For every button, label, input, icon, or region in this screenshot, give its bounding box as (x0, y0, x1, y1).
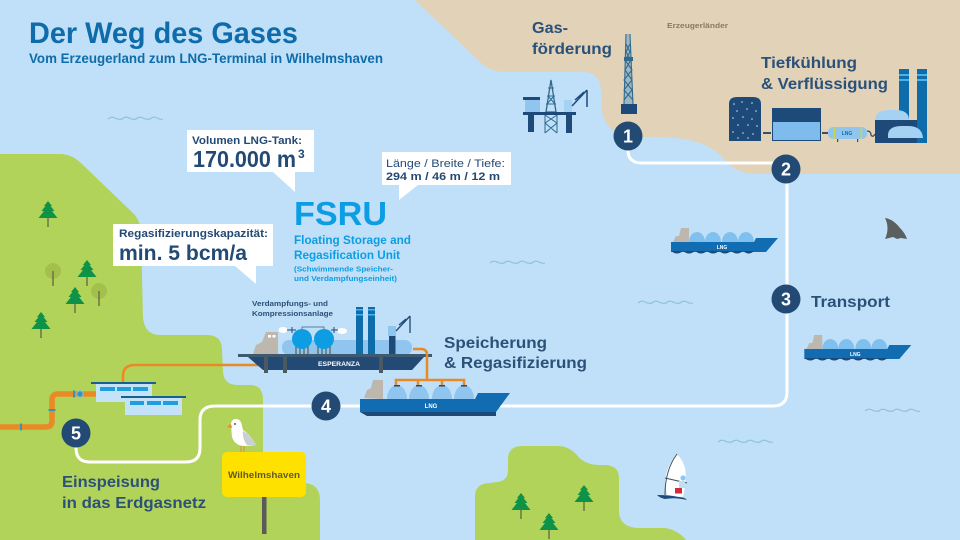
icon: shark fin (885, 218, 907, 239)
step label: Einspeisung (62, 474, 206, 512)
callout: Volumen LNG-Tank: 170.000 m (193, 146, 296, 172)
icon: seagull (227, 419, 256, 452)
label: Verdampfungsanlage: Verdampfungs- und (252, 299, 328, 308)
title: Der Weg des Gases (29, 17, 298, 50)
land: south island (475, 446, 686, 540)
orange transfer pipe (396, 349, 464, 385)
step marker 5 (62, 418, 90, 448)
step marker 3: 3 (781, 290, 791, 310)
icon: LNG tanker top (671, 228, 778, 254)
FSRU heading: und Verdampfungseinheit) (294, 276, 397, 283)
step label: Speicherung: Speicherung (444, 335, 547, 352)
callout: Regasifizierungskapazität (113, 224, 273, 284)
step label: Einspeisung: in das Erdgasnetz (62, 495, 206, 512)
step label: Speicherung (444, 335, 587, 372)
step marker 2: 2 (781, 160, 791, 180)
land: Erzeugerländer (415, 0, 960, 174)
icon: windsurfer (657, 454, 687, 500)
step marker 3 (772, 284, 800, 314)
step label: Tiefkühlung: Tiefkühlung (761, 55, 857, 72)
step label: Gasförderung (532, 20, 612, 58)
callout: Regasifizierungskapazität: min. 5 bcm/a (119, 242, 247, 265)
sign: Wilhelmshaven: Wilhelmshaven (228, 470, 300, 481)
subtitle: Vom Erzeugerland zum LNG-Terminal in Wilhelmshaven (29, 51, 383, 66)
icon: LNG tanker top: LNG (717, 245, 727, 251)
icon: terminal buildings (91, 382, 186, 415)
pipeline (0, 365, 258, 430)
FSRU heading (294, 195, 411, 283)
callout: Abmessungen (382, 152, 511, 200)
callout: Regasifizierungskapazität: Regasifizierungskapazität: (119, 228, 268, 240)
FSRU heading: Floating Storage and (294, 235, 411, 247)
icon: offshore platform (523, 80, 587, 133)
callout: Abmessungen: Länge / Breite / Tiefe: (386, 158, 505, 170)
step marker 4 (312, 392, 340, 420)
icon: drilling tower (621, 34, 637, 114)
step label: Tiefkühlung: & Verflüssigung (761, 76, 888, 93)
step marker 1 (614, 122, 642, 150)
step label: Tiefkühlung (761, 55, 888, 93)
label: Erzeugerländer: Erzeugerländer (667, 23, 728, 30)
callout: Volumen LNG-Tank: Volumen LNG-Tank: (192, 135, 302, 147)
step marker 4: 4 (321, 396, 331, 416)
FSRU heading: Regasification Unit (294, 250, 400, 262)
sign: Wilhelmshaven (222, 452, 306, 534)
icon: LNG tanker bottom (804, 335, 911, 360)
step label: Einspeisung: Einspeisung (62, 474, 160, 491)
callout: Volumen LNG-Tank: 3 (298, 147, 305, 161)
step label: Gasförderung: förderung (532, 41, 612, 58)
FSRU heading: (Schwimmende Speicher- (294, 266, 394, 274)
icon: liquefaction plant: LNG (842, 131, 852, 137)
waves (108, 117, 920, 442)
step marker 5: 5 (71, 424, 81, 444)
label: Verdampfungsanlage: Kompressionsanlage (252, 309, 333, 318)
icon: liquefaction plant (729, 69, 927, 143)
step label: Gasförderung: Gas- (532, 20, 568, 37)
icon: LNG tanker bottom: LNG (850, 352, 861, 358)
step label: Transport: Transport (811, 294, 891, 311)
callout: Abmessungen: 294 m / 46 m / 12 m (386, 171, 500, 183)
label: Verdampfungsanlage (252, 299, 333, 318)
route line (76, 140, 787, 462)
FSRU ship: Esperanza (238, 307, 432, 373)
FSRU ship: Esperanza: ESPERANZA (318, 361, 360, 368)
callout: Volumen LNG-Tank (187, 130, 314, 192)
LNG tanker at terminal: LNG (425, 404, 438, 410)
step marker 1: 1 (623, 126, 633, 146)
FSRU heading: FSRU (294, 195, 387, 232)
step label: Speicherung: & Regasifizierung (444, 355, 587, 372)
trees (32, 201, 594, 539)
step marker 2 (772, 154, 800, 184)
land: west coast (0, 154, 320, 540)
LNG tanker at terminal (360, 380, 510, 416)
